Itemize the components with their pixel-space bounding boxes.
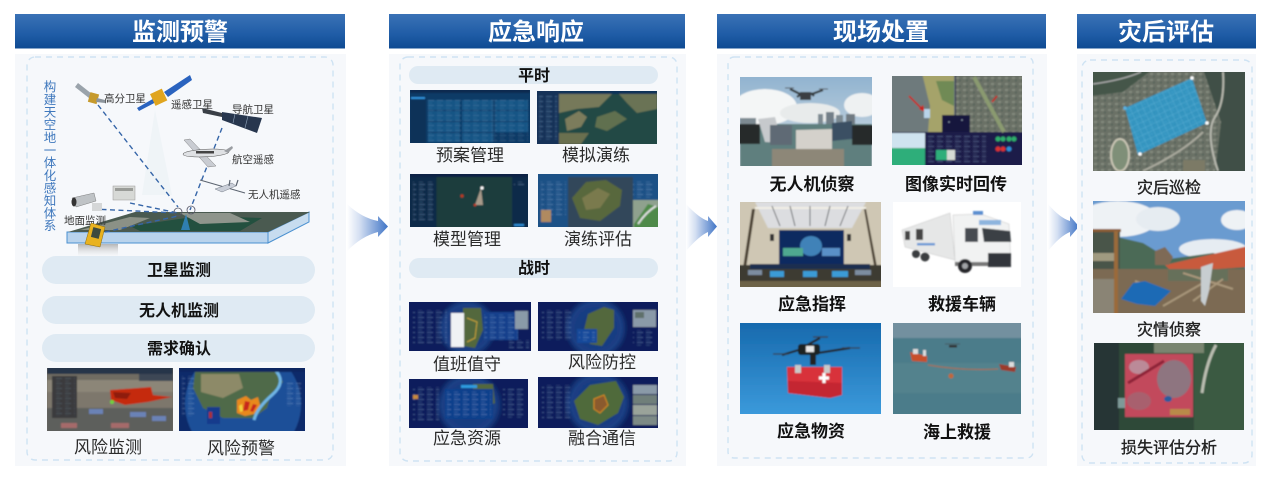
- label: 无人机侦察: 无人机侦察: [770, 174, 854, 194]
- image: 风险监测: [47, 368, 173, 431]
- label: 救援车辆: 救援车辆: [928, 294, 996, 314]
- arrow: to 灾后评估: [1048, 204, 1079, 251]
- panel: 应急响应: [389, 14, 686, 466]
- image: 灾后巡检: [1093, 72, 1245, 171]
- label: 海上救援: 海上救援: [923, 423, 991, 442]
- image: 救援车辆: [893, 202, 1021, 287]
- pill: 无人机监测: [42, 296, 315, 324]
- image: 风险预警: [179, 368, 305, 431]
- pill: 无人机监测: 无人机监测: [139, 302, 219, 320]
- icon: survey aircraft: [183, 139, 274, 167]
- image: 应急资源: [409, 379, 528, 428]
- image: 预案管理: [410, 90, 530, 143]
- label: 值班值守: 值班值守: [433, 355, 501, 374]
- label: 模拟演练: 模拟演练: [562, 146, 630, 165]
- icon: navigation satellite: [202, 103, 274, 133]
- image: 无人机侦察: [740, 77, 872, 166]
- icon: ground cameras and sensors: 地面监测: [64, 214, 106, 227]
- panel: 灾后评估: [1077, 14, 1256, 466]
- label: 灾情侦察: 灾情侦察: [1137, 321, 1201, 339]
- icon: navigation satellite: 导航卫星: [232, 103, 274, 116]
- image: 融合通信: [538, 377, 658, 428]
- pill: 平时: [409, 66, 658, 85]
- icon: ground cameras and sensors: [64, 186, 135, 256]
- icon: survey aircraft: 航空遥感: [232, 153, 274, 166]
- header: 应急响应: 应急响应: [488, 19, 584, 46]
- image: 海上救援: [893, 323, 1021, 414]
- diagram: space-air-ground sensing: [64, 75, 310, 256]
- label: 风险防控: 风险防控: [568, 353, 636, 372]
- arrow: to 现场处置: [686, 204, 717, 251]
- header: 监测预警: 监测预警: [132, 19, 228, 46]
- image: 风险防控: [538, 302, 658, 351]
- image: 图像实时回传: [892, 76, 1022, 165]
- terrain platform: [67, 212, 310, 243]
- icon: remote sensing satellite: [137, 75, 213, 111]
- header: 现场处置: [717, 14, 1046, 48]
- icon: UAV: 无人机遥感: [248, 188, 301, 201]
- label: 灾后巡检: 灾后巡检: [1137, 179, 1201, 197]
- dashed sensing links: [93, 105, 222, 232]
- pill: 卫星监测: [42, 256, 315, 284]
- pill: 战时: 战时: [518, 260, 550, 278]
- header: 应急响应: [389, 14, 685, 48]
- icon: high-resolution satellite: 高分卫星: [104, 92, 146, 105]
- icon: UAV: [200, 180, 301, 201]
- arrow: to 应急响应: [347, 204, 388, 251]
- image: 应急指挥: [740, 202, 881, 287]
- label: 图像实时回传: 图像实时回传: [905, 174, 1007, 194]
- pill: 需求确认: 需求确认: [147, 340, 211, 358]
- image: 值班值守: [409, 302, 531, 351]
- icon: high-resolution satellite: [75, 83, 146, 105]
- icon: remote sensing satellite: 遥感卫星: [171, 98, 213, 111]
- panel: 监测预警: [15, 14, 346, 466]
- header: 灾后评估: [1077, 14, 1256, 48]
- image: 模型管理: [410, 174, 528, 227]
- pill: 需求确认: [42, 334, 315, 362]
- vertical heading: 构建天空地一体化感知体系: 构建天空地一体化感知体系: [44, 79, 57, 233]
- label: 预案管理: 预案管理: [436, 146, 504, 165]
- image: 损失评估分析: [1094, 343, 1244, 430]
- header: 现场处置: 现场处置: [833, 19, 929, 46]
- pill: 卫星监测: 卫星监测: [147, 262, 211, 280]
- label: 模型管理: 模型管理: [433, 230, 501, 249]
- pill: 平时: 平时: [518, 67, 550, 85]
- label: 应急指挥: 应急指挥: [778, 294, 846, 314]
- label: 应急资源: 应急资源: [433, 429, 501, 448]
- header: 灾后评估: 灾后评估: [1118, 19, 1214, 46]
- image: 模拟演练: [537, 91, 657, 144]
- header: 监测预警: [15, 14, 345, 48]
- panel: 现场处置: [717, 14, 1047, 466]
- label: 融合通信: 融合通信: [568, 429, 636, 448]
- label: 损失评估分析: 损失评估分析: [1121, 439, 1217, 457]
- label: 演练评估: 演练评估: [564, 230, 632, 249]
- image: 演练评估: [538, 174, 658, 227]
- label: 风险监测: 风险监测: [74, 438, 142, 457]
- label: 应急物资: 应急物资: [777, 421, 845, 441]
- image: 灾情侦察: [1093, 201, 1245, 313]
- image: 应急物资: [740, 323, 881, 414]
- pill: 战时: [409, 258, 658, 278]
- label: 风险预警: 风险预警: [207, 439, 275, 458]
